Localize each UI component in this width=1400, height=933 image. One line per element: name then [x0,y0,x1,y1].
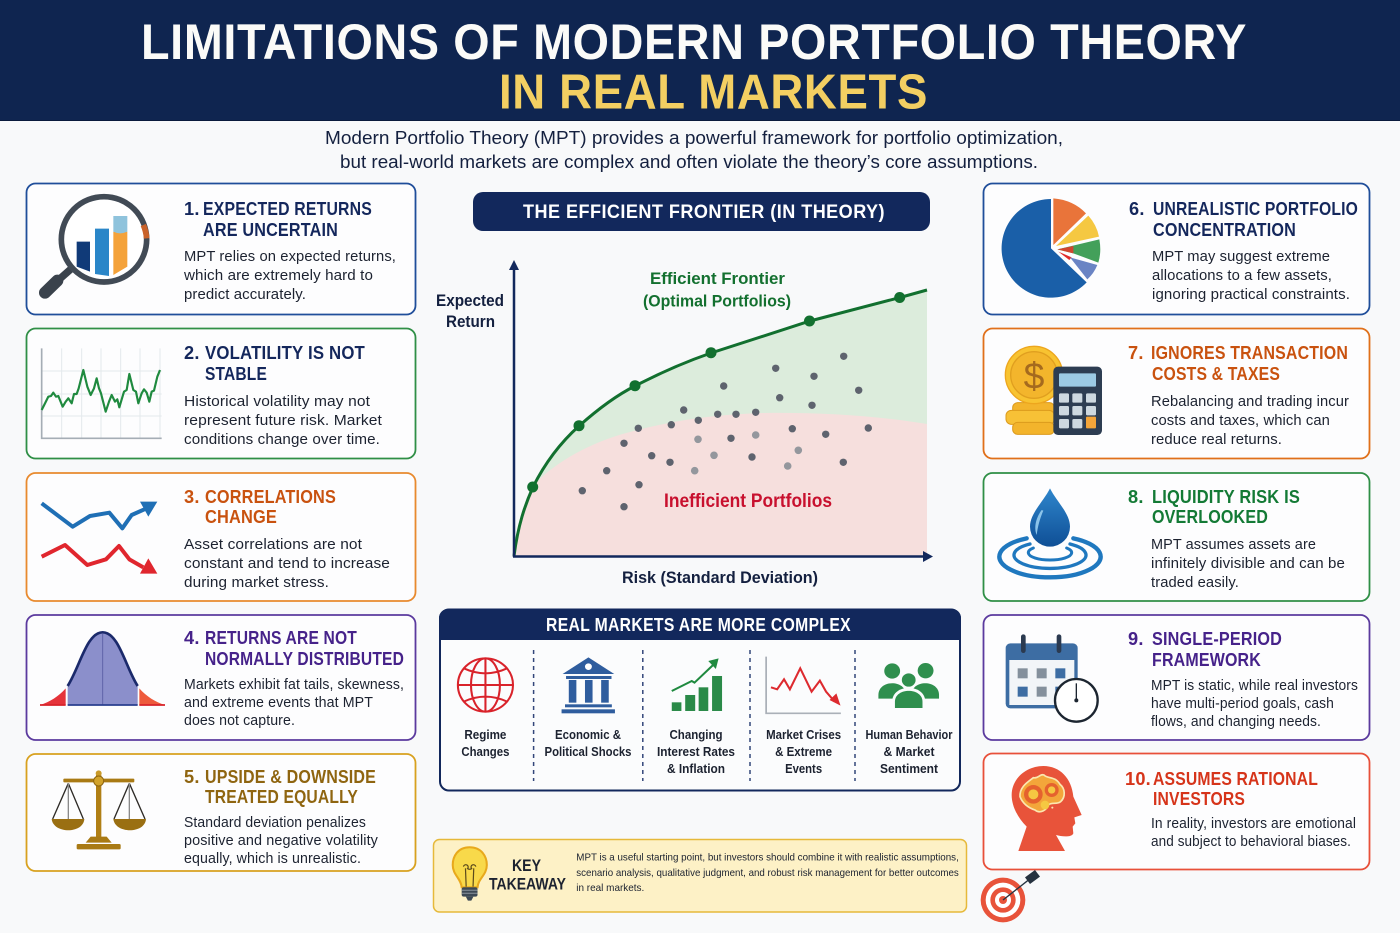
panel: 3 correlations change [26,473,416,601]
heading: CHANGE [205,507,277,527]
description: does not capture. [184,712,295,729]
heading: 4. [184,628,200,648]
icon: water drop with ripples [999,488,1101,577]
description [1151,393,1349,448]
label: human behavior and market sentiment: Sentiment [880,761,939,776]
description: In reality, investors are emotional [1151,815,1356,832]
heading [1128,629,1282,670]
icon: diverging arrows [42,502,157,574]
description: Rebalancing and trading incur [1151,393,1349,410]
label: regime changes: Regime [464,727,506,742]
icon: light bulb [453,847,487,901]
panel: real markets are more complex [439,609,961,790]
label: economic and political shocks [544,727,632,759]
heading: 8. [1128,487,1144,507]
heading [184,343,365,384]
icon: target and dart [981,870,1040,922]
chart: efficient frontier [436,260,933,587]
heading: NORMALLY DISTRIBUTED [205,649,404,669]
label: changing interest rates and inflation: Interest Rates [657,744,735,759]
heading [184,767,376,807]
label: human behavior and market sentiment: Human Behavior [866,727,952,742]
heading [184,628,404,669]
description: Asset correlations are not [184,536,363,553]
label: changing interest rates and inflation: Changing [670,727,722,742]
heading: LIQUIDITY RISK IS [1152,487,1300,507]
description: positive and negative volatility [184,832,378,849]
description: Markets exhibit fat tails, skewness, [184,676,404,693]
panel: 9 single-period framework [984,615,1370,740]
description: represent future risk. Market [184,412,383,429]
description [1151,677,1358,730]
panel: 6 unrealistic portfolio concentration [984,184,1370,314]
description: and subject to behavioral biases. [1151,833,1351,850]
heading [184,199,372,240]
panel heading: REAL MARKETS ARE MORE COMPLEX [546,615,851,635]
panel: 1 expected returns are uncertain [26,184,416,314]
heading: 6. [1129,199,1145,219]
heading: ASSUMES RATIONAL [1153,769,1318,789]
subtitle: Modern Portfolio Theory (MPT) provides a powerful framework for portfolio optimization, [325,127,1063,148]
label: inefficient portfolios: Inefficient Portfolios [664,490,832,512]
icon: balance scales [52,770,146,849]
heading: 9. [1128,629,1144,649]
heading: VOLATILITY IS NOT [205,343,365,363]
description [1151,536,1345,591]
heading: 1. [184,199,200,219]
icon: crisis chart [766,657,841,713]
description: have multi-period goals, cash [1151,695,1334,712]
description: and extreme events that MPT [184,694,373,711]
title line 2: IN REAL MARKETS [499,66,928,120]
icon: volatile line chart [42,348,162,438]
heading: COSTS & TAXES [1152,364,1280,384]
description: MPT is static, while real investors [1151,677,1358,694]
heading: EXPECTED RETURNS [203,199,372,219]
key takeaway label [489,856,567,894]
panel: 5 upside and downside treated equally [26,754,416,871]
heading: 2. [184,343,200,363]
heading: INVESTORS [1153,789,1245,809]
label: market crises and extreme events [766,727,841,776]
heading: STABLE [205,364,267,384]
description: which are extremely hard to [183,267,373,284]
description: constant and tend to increase [184,555,390,572]
takeaway text: scenario analysis, qualitative judgment, and robust risk management for better outcomes [576,867,959,879]
label: regime changes [461,727,509,759]
description: conditions change over time. [184,431,380,448]
heading [1128,343,1348,384]
heading: FRAMEWORK [1152,650,1261,670]
heading: 10. [1125,769,1151,789]
label: human behavior and market sentiment: & Market [884,744,935,759]
icon: people [878,663,939,710]
icon: coins and calculator: $ [1024,354,1045,396]
heading: RETURNS ARE NOT [205,628,357,648]
label: changing interest rates and inflation: & Inflation [667,761,725,776]
panel: 7 ignores transaction costs and taxes [984,328,1370,458]
frontier points [527,292,905,492]
key takeaway label: TAKEAWAY [489,874,567,894]
heading: SINGLE-PERIOD [1152,629,1282,649]
icon: magnifying glass over bars [45,197,147,293]
description [1152,248,1350,303]
description: MPT assumes assets are [1151,536,1316,553]
heading: 3. [184,487,200,507]
label: economic and political shocks: Political Shocks [544,744,632,759]
callout: key takeaway [434,840,966,912]
scatter of portfolios [579,353,872,510]
axis label: expected return [436,292,504,331]
heading: TREATED EQUALLY [205,787,358,807]
heading [1125,769,1318,809]
description: costs and taxes, which can [1151,412,1330,429]
heading: UPSIDE & DOWNSIDE [205,767,376,787]
heading: 5. [184,767,200,787]
icon: coins and calculator [1005,346,1102,435]
description [184,814,378,867]
icon: bell curve with fat tails [40,632,165,705]
description [184,393,383,448]
heading: UNREALISTIC PORTFOLIO [1153,199,1358,219]
description: flows, and changing needs. [1151,713,1321,730]
label: market crises and extreme events: Events [785,761,822,776]
description: traded easily. [1151,574,1239,591]
label: regime changes: Changes [461,744,509,759]
heading [1129,199,1358,240]
panel: 10 assumes rational investors [984,754,1370,870]
heading pill: efficient frontier: THE EFFICIENT FRONTIER (IN THEORY) [523,201,885,223]
takeaway text: MPT is a useful starting point, but investors should combine it with realistic assumptions, [576,852,959,864]
heading pill: efficient frontier [473,192,930,231]
label: human behavior and market sentiment [866,727,952,776]
description: equally, which is unrealistic. [184,850,361,867]
description: MPT may suggest extreme [1152,248,1330,265]
description: during market stress. [184,574,329,591]
area: feasible region [514,290,927,556]
label: market crises and extreme events: & Extreme [775,744,832,759]
icon: rising bars [672,658,722,711]
description: MPT relies on expected returns, [184,248,396,265]
takeaway text: in real markets. [576,882,644,894]
description [184,536,390,591]
axis label: risk: Risk (Standard Deviation) [622,569,818,587]
key takeaway label: KEY [512,856,542,875]
label: economic and political shocks: Economic & [555,727,621,742]
heading: OVERLOOKED [1152,507,1268,527]
area: inefficient region [514,413,927,556]
axes [509,260,933,562]
description: ignoring practical constraints. [1152,286,1350,303]
icon: head with brain [1012,766,1082,851]
label: changing interest rates and inflation [657,727,735,776]
description [183,248,396,303]
axis label: expected return: Expected [436,292,504,310]
subtitle [325,127,1063,172]
label: efficient frontier [643,269,791,310]
heading: IGNORES TRANSACTION [1151,343,1348,363]
description [1151,815,1356,850]
frontier curve [514,290,927,556]
heading: ARE UNCERTAIN [203,220,338,240]
title line 1: LIMITATIONS OF MODERN PORTFOLIO THEORY [141,14,1247,70]
takeaway text [576,852,959,894]
subtitle: but real-world markets are complex and often violate the theory’s core assumptions. [340,151,1038,172]
label: market crises and extreme events: Market Crises [766,727,841,742]
description: allocations to a few assets, [1152,267,1332,284]
icon: pie chart [1002,198,1100,298]
icon: globe [458,658,513,712]
header band [0,0,1400,121]
panel: 2 volatility is not stable [26,328,416,458]
heading [184,487,336,527]
description: Standard deviation penalizes [184,814,366,831]
heading [1128,487,1300,527]
label: efficient frontier: Efficient Frontier [650,269,785,288]
panel: 8 liquidity risk is overlooked [984,473,1370,601]
icon: bank [562,657,615,713]
description: infinitely divisible and can be [1151,555,1345,572]
description [184,676,404,729]
description: reduce real returns. [1151,431,1282,448]
heading: 7. [1128,343,1144,363]
icon: calendar and clock [1006,637,1098,722]
heading: CORRELATIONS [205,487,336,507]
axis label: expected return: Return [446,313,495,331]
panel: 4 returns are not normally distributed [26,615,416,740]
description: predict accurately. [184,286,306,303]
description: Historical volatility may not [184,393,371,410]
label: efficient frontier: (Optimal Portfolios) [643,292,791,310]
heading: CONCENTRATION [1153,220,1296,240]
